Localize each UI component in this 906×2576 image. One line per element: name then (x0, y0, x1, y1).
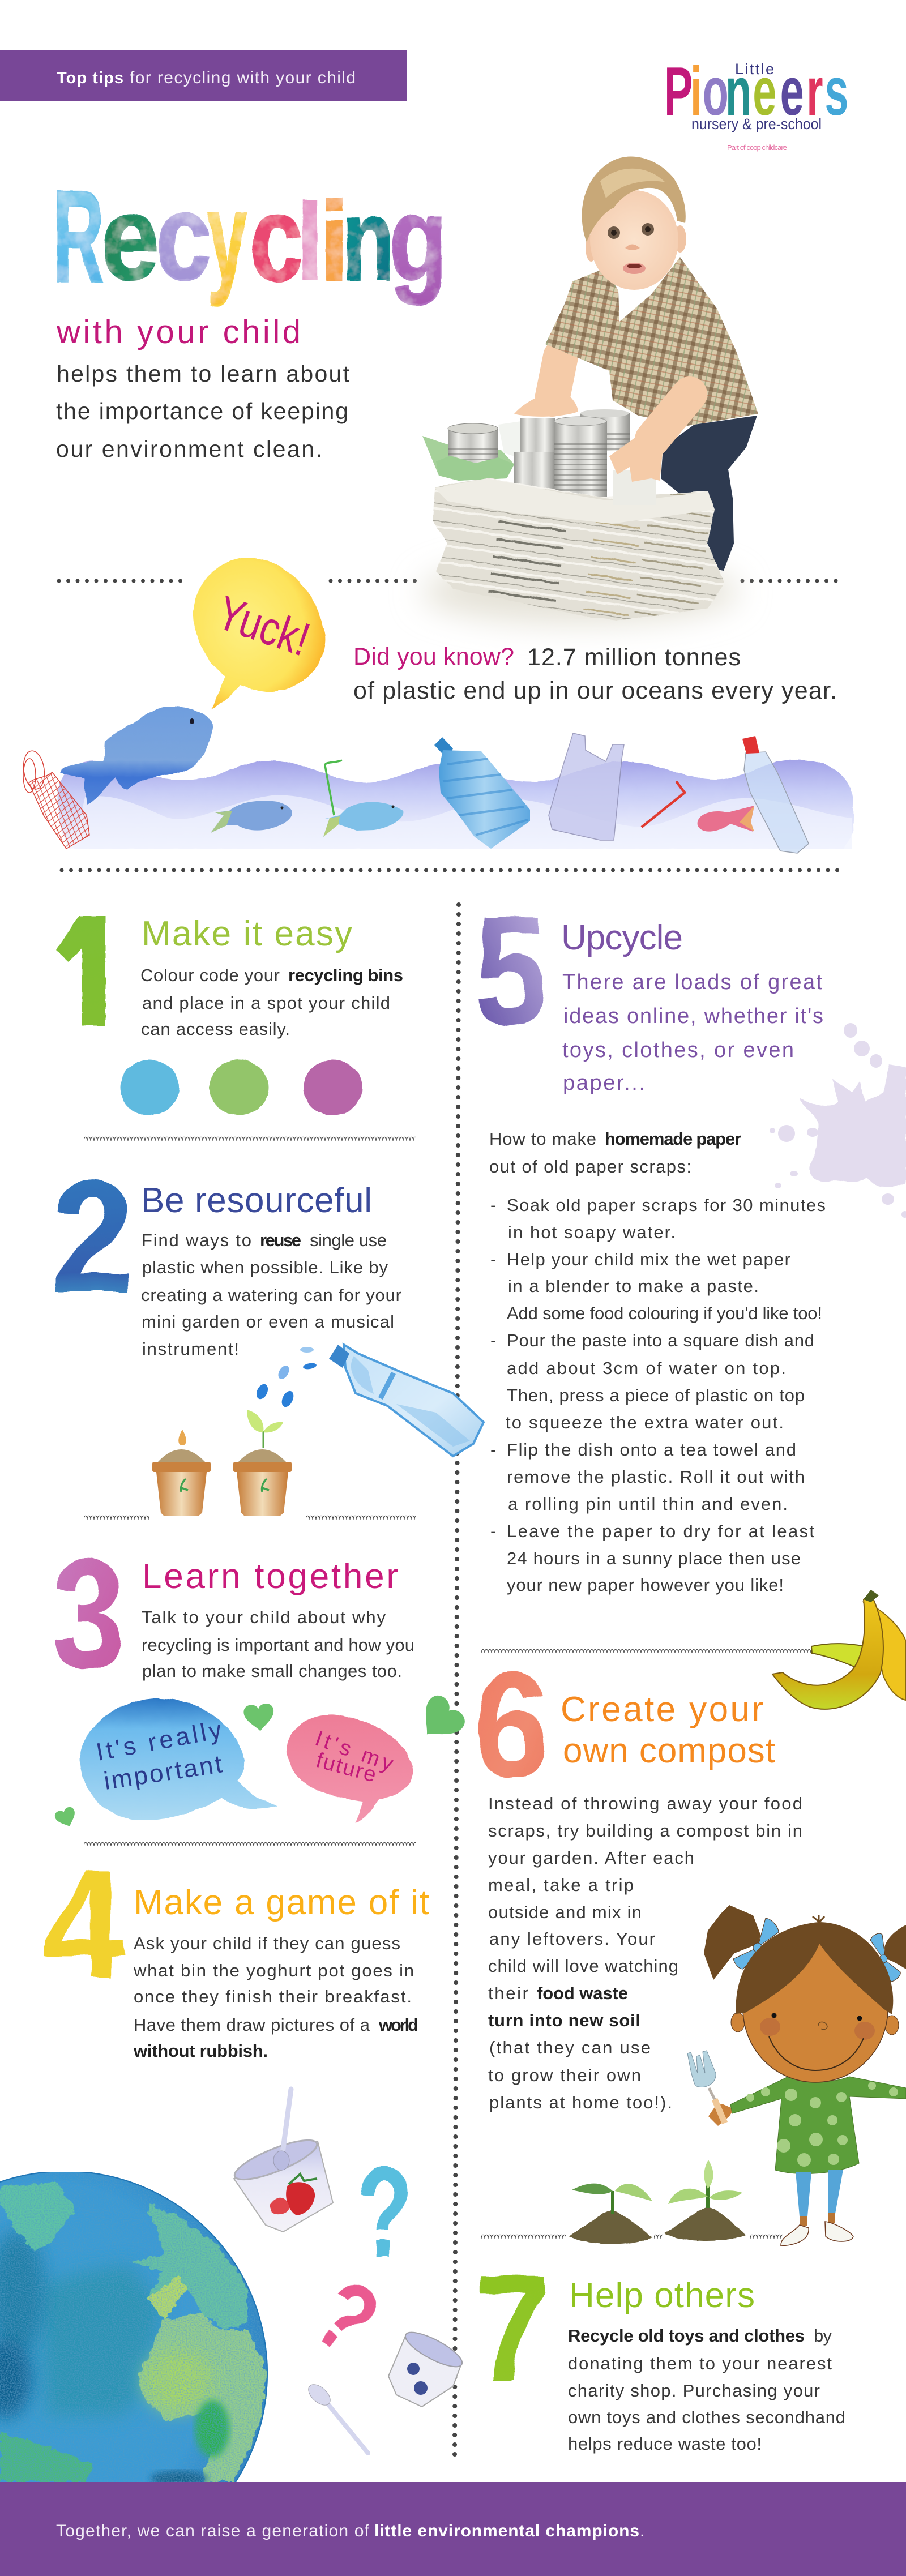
body text: what bin the yoghurt pot goes in (133, 1961, 414, 1980)
tip 1: Make it easy (56, 914, 403, 1115)
seedling right (664, 2160, 746, 2241)
tip 6: Create your own compost (473, 1641, 802, 2112)
body text: any leftovers. Your (489, 1929, 655, 1949)
plastic bag (549, 733, 624, 840)
body text: recycling bins (288, 965, 403, 985)
subtitle: with your child (56, 314, 301, 350)
heart small (243, 1703, 275, 1732)
tip 3: Learn together (52, 1527, 469, 1830)
logo: Little Pioneers: s (824, 52, 848, 130)
logo: Little Pioneers: Little (735, 61, 774, 78)
title: Recycling: R (53, 164, 104, 310)
how-to steps: to squeeze the extra water out. (506, 1413, 784, 1432)
body text: Colour code your (140, 965, 280, 985)
pink fish (698, 806, 754, 832)
speech bubble: It's really important: It's really (94, 1716, 224, 1766)
body text: reuse (260, 1230, 301, 1250)
how-to steps: a rolling pin until thin and even. (508, 1494, 788, 1514)
how-to steps: - (490, 1195, 496, 1215)
body text (141, 1230, 401, 1359)
question mark pink: ? (295, 2258, 399, 2376)
shirt (545, 257, 758, 426)
speech bubble: It's my future: It's my (312, 1727, 396, 1776)
yogurt pot with blueberries (388, 2326, 466, 2407)
body text: plants at home too!). (489, 2093, 672, 2112)
whale (61, 707, 213, 805)
paint splat (770, 1023, 906, 1218)
photo: toddler with cans and newspapers (422, 157, 758, 623)
title: Recycling: l (297, 181, 323, 303)
heading: Make it easy (142, 914, 352, 953)
heading: Help others (569, 2276, 755, 2315)
tin can D (613, 470, 656, 505)
plastic bottle with water (329, 1345, 484, 1456)
plastic bottle large (434, 737, 530, 849)
clear plastic bottle (742, 736, 809, 853)
body text: scraps, try building a compost bin in (488, 1821, 802, 1841)
title: Recycling: i (319, 178, 349, 305)
footer banner: . (640, 2522, 644, 2540)
intro text: There are loads of great (562, 970, 822, 994)
squiggle divider 1 (84, 1136, 416, 1141)
shoes (781, 2222, 853, 2246)
how-to steps: 24 hours in a sunny place then use (507, 1548, 801, 1568)
how-to steps: Soak old paper scraps for 30 minutes (507, 1195, 826, 1215)
left pigtail (704, 1905, 760, 1980)
top banner: for recycling with your child (130, 69, 356, 87)
body text: world (378, 2015, 418, 2035)
dress (730, 2077, 906, 2173)
dotted divider middle (62, 868, 845, 872)
seedlings (569, 2160, 746, 2244)
intro text (562, 970, 823, 1095)
vertical dotted divider (455, 905, 459, 2456)
head (736, 1915, 893, 2082)
body text: helps reduce waste too! (568, 2434, 762, 2454)
subtitle: the importance of keeping (56, 398, 348, 424)
logo: Little Pioneers: e (780, 52, 804, 130)
tip 5: Upcycle (475, 884, 906, 1595)
how-to intro (489, 1129, 741, 1176)
yogurt pot with strawberries (230, 2089, 333, 2232)
body text: creating a watering can for your (141, 1285, 401, 1305)
small can (448, 423, 498, 463)
body text: food waste (537, 1983, 628, 2003)
footer banner: Together, we can raise a generation of (56, 2522, 370, 2540)
right arm and hand (609, 394, 690, 482)
plastic bottle (498, 421, 521, 459)
body text: donating them to your nearest (568, 2354, 832, 2373)
body text: Have them draw pictures of a (134, 2015, 370, 2035)
body text: can access easily. (141, 1019, 290, 1039)
body text: Instead of throwing away your food (488, 1794, 802, 1813)
garden fork (687, 2051, 725, 2123)
did you know fact: 12.7 million tonnes (527, 644, 741, 671)
pot with sprout (233, 1410, 292, 1516)
heading: Upcycle (561, 918, 683, 957)
logo: Little Pioneers: e (753, 52, 776, 130)
body text: meal, take a trip (488, 1875, 634, 1895)
heading: Learn together (142, 1557, 398, 1596)
top banner: Top tips (57, 69, 123, 87)
how-to steps: - (490, 1521, 496, 1541)
speech bubble: Yuck (193, 558, 325, 709)
how-to steps: add about 3cm of water on top. (507, 1358, 786, 1378)
logo: Little Pioneers: n (725, 52, 751, 130)
logo: Little Pioneers: i (690, 52, 702, 130)
body text: Talk to your child about why (142, 1607, 386, 1627)
speech bubble: It's really important: important (102, 1750, 224, 1795)
logo: Little Pioneers: o (703, 52, 729, 130)
title: Recycling: g (389, 173, 447, 305)
heading: own compost (563, 1731, 775, 1770)
girl illustration (687, 1905, 906, 2246)
squiggle divider 3 (84, 1842, 416, 1847)
speech bubble: Yuck: Yuck! (211, 585, 317, 666)
number 2: 2 (52, 1148, 134, 1325)
number 5: 5 (475, 884, 547, 1058)
title: Recycling: n (342, 176, 395, 305)
title: Recycling (53, 164, 447, 310)
bows (733, 1918, 900, 1982)
heading: Make a game of it (134, 1883, 429, 1922)
carton front (436, 456, 514, 481)
footer banner (0, 2482, 906, 2576)
body text: plan to make small changes too. (142, 1661, 402, 1681)
body text (142, 1607, 414, 1681)
subtitle (56, 314, 350, 462)
globe (0, 2172, 268, 2482)
colour swatches (120, 1060, 362, 1115)
body text: and place in a spot your child (142, 993, 390, 1013)
how-to steps: Add some food colouring if you'd like too! (507, 1303, 822, 1323)
body text: (that they can use (489, 2038, 651, 2057)
title: Recycling: c (250, 171, 304, 307)
newspaper shadow (422, 560, 739, 623)
dotted divider top (59, 579, 845, 583)
number 6: 6 (473, 1641, 549, 1809)
how-to steps: - (490, 1330, 496, 1350)
body text: their (488, 1983, 528, 2003)
intro text: paper... (563, 1071, 645, 1095)
question mark blue: ? (357, 2141, 412, 2285)
number 3: 3 (52, 1527, 125, 1701)
body text (140, 965, 403, 1039)
how-to steps: - (490, 1440, 496, 1460)
how-to steps: your new paper however you like! (507, 1575, 784, 1595)
body text: turn into new soil (488, 2010, 640, 2030)
squiggle divider 5 (481, 1649, 811, 1654)
fish 2 (323, 802, 403, 837)
number 1 (56, 916, 105, 1026)
squiggle divider 2 (84, 1515, 416, 1520)
body text: child will love watching (488, 1956, 678, 1976)
heart tiny (53, 1805, 79, 1830)
footer banner: little environmental champions (374, 2522, 639, 2540)
tin can C (580, 409, 630, 451)
body text: single use (310, 1230, 387, 1250)
how-to steps: Help your child mix the wet paper (507, 1250, 790, 1269)
body text: Find ways to (142, 1230, 251, 1250)
ears (731, 2013, 745, 2032)
top banner (0, 50, 407, 101)
number 7: 7 (475, 2244, 550, 2414)
heading: Be resourceful (141, 1181, 372, 1220)
body text: mini garden or even a musical (142, 1312, 394, 1332)
pot with seed (152, 1430, 211, 1516)
body text: outside and mix in (488, 1902, 642, 1922)
tin can A (514, 418, 555, 489)
title: Recycling: c (156, 169, 211, 305)
did you know fact: Did you know? (353, 643, 514, 670)
how-to steps: in hot soapy water. (508, 1222, 676, 1242)
body text: plastic when possible. Like by (142, 1257, 388, 1277)
how-to steps: Flip the dish onto a tea towel and (507, 1440, 796, 1460)
logo: Little Pioneers: Part of coop childcare (727, 143, 787, 152)
body text: to grow their own (488, 2065, 641, 2085)
how-to steps: Pour the paste into a square dish and (507, 1330, 814, 1350)
body text: once they finish their breakfast. (134, 1987, 412, 2006)
title: Recycling: e (101, 172, 159, 305)
speech bubble: It's really important (80, 1698, 277, 1820)
how-to steps: in a blender to make a paste. (508, 1276, 759, 1296)
logo: Little Pioneers: r (806, 52, 823, 130)
how-to steps: - (490, 1250, 496, 1269)
speech bubble: It's my future (287, 1715, 413, 1823)
jeans (661, 416, 757, 571)
net bag (21, 750, 89, 849)
body text (133, 1933, 418, 2061)
left arm and hand (514, 357, 578, 417)
subtitle: helps them to learn about (57, 361, 350, 387)
did you know fact (353, 643, 837, 704)
body text: Recycle old toys and clothes (568, 2326, 805, 2346)
body text: charity shop. Purchasing your (568, 2381, 820, 2400)
green straw (325, 760, 342, 815)
how-to steps: Leave the paper to dry for at least (507, 1521, 814, 1541)
body text: recycling is important and how you (142, 1635, 414, 1655)
fish 1 (211, 801, 292, 833)
tip 4: Make a game of it (0, 1869, 463, 2482)
logo: Little Pioneers: P (664, 52, 693, 130)
legs (796, 2170, 843, 2226)
body text: own toys and clothes secondhand (568, 2407, 845, 2427)
egg carton (422, 436, 514, 481)
subtitle: our environment clean. (56, 436, 322, 462)
logo: Little Pioneers: nursery & pre-school (691, 115, 822, 132)
how-to intro: homemade paper (605, 1129, 741, 1149)
water drops (254, 1347, 317, 1409)
how-to intro: out of old paper scraps: (489, 1157, 691, 1176)
red straw (642, 781, 685, 827)
body text (488, 1794, 802, 2112)
newspaper stack (433, 478, 725, 621)
how-to steps: remove the plastic. Roll it out with (507, 1467, 805, 1487)
tip 7: Help others (475, 2244, 845, 2454)
body text (568, 2326, 845, 2454)
body text: Ask your child if they can guess (134, 1933, 400, 1953)
speech bubble: It's my future: future (314, 1748, 379, 1787)
body text: your garden. After each (488, 1848, 694, 1868)
waves (58, 760, 854, 849)
head (582, 157, 686, 290)
tin can B (554, 417, 607, 500)
heading (561, 1690, 775, 1770)
did you know fact: of plastic end up in our oceans every year. (353, 677, 837, 704)
logo: Little Pioneers (664, 52, 848, 152)
squiggle divider 6 (481, 2234, 783, 2239)
body text: instrument! (142, 1339, 239, 1359)
body text: without rubbish. (133, 2041, 268, 2061)
intro text: ideas online, whether it's (563, 1004, 823, 1028)
seedling left (569, 2184, 652, 2244)
how-to steps (490, 1195, 826, 1595)
whale eye (190, 718, 194, 724)
how-to steps: Then, press a piece of plastic on top (507, 1385, 805, 1405)
body text: by (814, 2326, 832, 2346)
heading: Create your (561, 1690, 763, 1729)
number 4: 4 (42, 1838, 126, 2010)
heart large (411, 1691, 469, 1749)
ocean illustration (21, 707, 854, 853)
title: Recycling: y (207, 166, 247, 307)
spoon (305, 2381, 368, 2453)
tip 2: Be resourceful (52, 1148, 484, 1516)
right pigtail (884, 1925, 906, 1969)
how-to intro: How to make (489, 1129, 596, 1149)
hand (708, 2104, 734, 2126)
intro text: toys, clothes, or even (562, 1038, 794, 1062)
banana peel (772, 1590, 906, 1709)
